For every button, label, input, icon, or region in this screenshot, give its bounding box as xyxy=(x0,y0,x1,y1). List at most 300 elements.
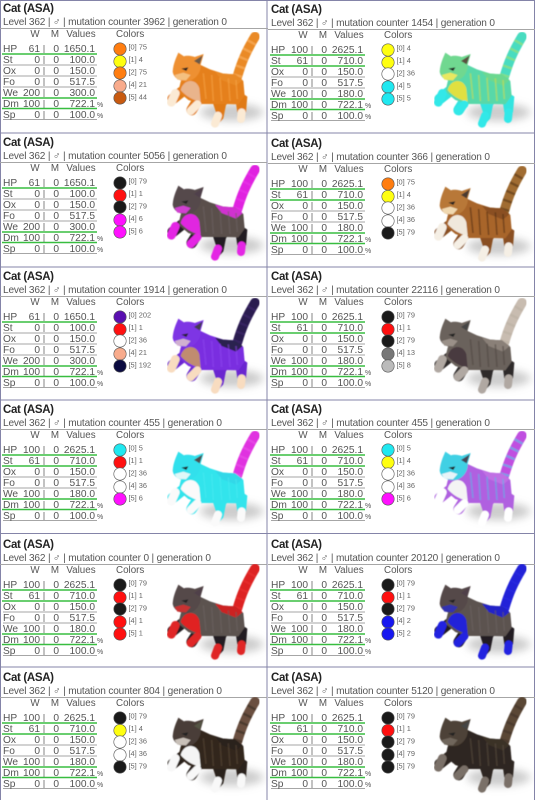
stats table: 0 xyxy=(302,67,308,78)
stats table: % xyxy=(365,237,371,244)
stats table: 61 xyxy=(29,724,40,735)
stats table: M xyxy=(51,698,59,709)
stats table: HP xyxy=(3,312,17,323)
stats table: 150.0 xyxy=(338,334,363,345)
stats table: 100 xyxy=(291,100,308,111)
stats table: % xyxy=(97,649,103,656)
stats table: 61 xyxy=(297,323,308,334)
stats table: 300.0 xyxy=(70,222,95,233)
colors legend: [0] 75 xyxy=(396,178,415,186)
stats table: 0 xyxy=(53,88,59,99)
colors legend: [0] 79 xyxy=(396,578,415,588)
stats table: M xyxy=(51,297,59,308)
stats table: St xyxy=(271,724,281,735)
stats table xyxy=(0,698,267,790)
stats table: We xyxy=(271,757,286,768)
stats table: 180.0 xyxy=(338,223,363,234)
stats table: 0 xyxy=(302,646,308,657)
icon: purple cat xyxy=(171,303,263,391)
colors legend: [0] 79 xyxy=(128,176,147,186)
colors legend: [0] 79 xyxy=(396,712,415,720)
stats table: 150.0 xyxy=(70,200,95,211)
stats table: 0 xyxy=(53,312,59,323)
stats table: 0 xyxy=(53,200,59,211)
stats table: 0 xyxy=(321,245,327,256)
stats table: We xyxy=(3,489,18,500)
stats table: 0 xyxy=(321,635,327,646)
stats table: Fo xyxy=(271,78,283,89)
stats table: 61 xyxy=(29,178,40,189)
stats table: 710.0 xyxy=(338,190,363,201)
stats table: 0 xyxy=(53,323,59,334)
stats table: 0 xyxy=(321,456,327,467)
stats table: M xyxy=(51,163,59,174)
stats table: We xyxy=(3,88,18,99)
stats table: 0 xyxy=(321,201,327,212)
stats table: 0 xyxy=(302,345,308,356)
stats table: % xyxy=(365,514,371,521)
stats table: 100.0 xyxy=(70,189,95,200)
stats table: Ox xyxy=(3,467,16,478)
stats table: 0 xyxy=(34,189,40,200)
stats table: 0 xyxy=(321,223,327,234)
stats table: 0 xyxy=(53,602,59,613)
colors legend: [5] 5 xyxy=(396,94,411,102)
stats table: 2625.1 xyxy=(64,445,95,456)
stats table: 0 xyxy=(53,356,59,367)
panel: cat card left 3 xyxy=(0,271,267,391)
stats table: 0 xyxy=(321,312,327,323)
stats table: 0 xyxy=(34,779,40,790)
stats table: 722.1 xyxy=(338,234,363,245)
subtitle: Level 362 | ♂ | mutation counter 5056 | generation 0 xyxy=(3,151,227,162)
stats table: 61 xyxy=(29,44,40,55)
stats table: % xyxy=(365,771,371,778)
stats table: 300.0 xyxy=(70,88,95,99)
stats table xyxy=(268,296,535,389)
panel: cat card right 5 xyxy=(268,539,535,657)
stats table: We xyxy=(3,356,18,367)
stats table: 61 xyxy=(297,56,308,67)
stats table: Dm xyxy=(271,500,287,511)
stats table: 100.0 xyxy=(70,646,95,657)
stats table: 61 xyxy=(297,190,308,201)
stats table: 0 xyxy=(321,467,327,478)
stats table: W xyxy=(30,430,40,441)
colors legend: Colors xyxy=(384,164,412,175)
stats table: Values xyxy=(334,297,364,308)
stats table: 0 xyxy=(321,212,327,223)
stats table: 710.0 xyxy=(70,591,95,602)
stats table: 0 xyxy=(302,511,308,522)
stats table: 0 xyxy=(321,67,327,78)
stats table: Values xyxy=(334,430,364,441)
colors legend: [1] 4 xyxy=(396,56,411,65)
stats table: Fo xyxy=(3,211,15,222)
stats table: 0 xyxy=(302,78,308,89)
stats table: % xyxy=(365,114,371,121)
icon: tabby brown cat xyxy=(438,171,530,259)
colors legend: [4] 36 xyxy=(396,481,415,490)
stats table: 722.1 xyxy=(70,99,95,110)
stats table: 2625.1 xyxy=(332,312,363,323)
colors legend: [0] 5 xyxy=(128,444,143,452)
stats table: Values xyxy=(66,565,96,576)
stats table: Values xyxy=(334,698,364,709)
stats table: 0 xyxy=(302,602,308,613)
colors legend: [2] 75 xyxy=(128,68,147,76)
stats table: St xyxy=(3,591,13,602)
stats table: 100 xyxy=(291,445,308,456)
colors legend: [2] 36 xyxy=(396,202,415,212)
stats table: St xyxy=(271,56,281,67)
colors legend: [5] 2 xyxy=(396,628,411,638)
stats table: Sp xyxy=(3,511,16,522)
stats table: 150.0 xyxy=(338,67,363,78)
stats table: 0 xyxy=(321,779,327,790)
stats table: M xyxy=(319,698,327,709)
stats table: Values xyxy=(66,430,96,441)
stats table: % xyxy=(97,102,103,109)
panel: cat card right 6 xyxy=(268,672,535,790)
stats table: 100.0 xyxy=(70,110,95,121)
colors legend: Colors xyxy=(384,30,412,41)
stats table: Dm xyxy=(271,100,287,111)
stats table: 0 xyxy=(53,345,59,356)
stats table: 517.5 xyxy=(338,78,363,89)
colors legend: [4] 21 xyxy=(128,80,147,89)
stats table: We xyxy=(3,624,18,635)
stats table: Ox xyxy=(271,334,284,345)
stats table: Values xyxy=(66,29,96,40)
stats table: 100.0 xyxy=(338,378,363,389)
stats table: Values xyxy=(66,163,96,174)
stats table: 0 xyxy=(53,580,59,591)
stats table: 0 xyxy=(321,111,327,122)
stats table: 722.1 xyxy=(338,100,363,111)
colors legend: [1] 4 xyxy=(396,456,411,465)
icon: orange cat xyxy=(171,37,263,125)
stats table: 0 xyxy=(53,779,59,790)
title: Cat (ASA) xyxy=(271,672,322,684)
stats table: 0 xyxy=(53,211,59,222)
stats table: We xyxy=(271,223,286,234)
colors legend: [5] 1 xyxy=(128,628,143,638)
stats table: 0 xyxy=(53,635,59,646)
title: Cat (ASA) xyxy=(271,404,322,416)
stats table: % xyxy=(365,782,371,789)
subtitle: Level 362 | ♂ | mutation counter 455 | generation 0 xyxy=(271,418,490,429)
stats table: 100.0 xyxy=(338,111,363,122)
stats table: 0 xyxy=(53,489,59,500)
stats table: 150.0 xyxy=(70,66,95,77)
stats table: 180.0 xyxy=(338,757,363,768)
stats table: % xyxy=(97,236,103,243)
stats table: Ox xyxy=(3,735,16,746)
stats table: 0 xyxy=(302,779,308,790)
stats table: 0 xyxy=(53,646,59,657)
stats table: 0 xyxy=(321,345,327,356)
colors legend: Colors xyxy=(116,297,144,308)
stats table: 100.0 xyxy=(70,55,95,66)
colors legend: [4] 36 xyxy=(128,749,147,758)
stats table: We xyxy=(271,89,286,100)
stats table: 100 xyxy=(23,635,40,646)
stats table: 722.1 xyxy=(70,233,95,244)
colors legend: [5] 79 xyxy=(396,228,415,236)
colors legend xyxy=(114,698,147,773)
stats table: Dm xyxy=(3,768,19,779)
colors legend: Colors xyxy=(384,698,412,709)
colors legend xyxy=(382,698,415,773)
stats table: 100 xyxy=(291,500,308,511)
stats table: 710.0 xyxy=(338,56,363,67)
stats table: Values xyxy=(66,297,96,308)
stats table: 0 xyxy=(34,746,40,757)
stats table: 100 xyxy=(23,580,40,591)
stats table: 0 xyxy=(34,77,40,88)
stats table: 517.5 xyxy=(70,211,95,222)
stats table: % xyxy=(365,649,371,656)
icon: green and cyan cat xyxy=(438,37,530,125)
stats table: 0 xyxy=(321,179,327,190)
panel: cat card left 1 xyxy=(0,3,268,125)
colors legend: [2] 79 xyxy=(128,604,147,612)
stats table: % xyxy=(97,782,103,789)
stats table: 180.0 xyxy=(338,356,363,367)
title: Cat (ASA) xyxy=(271,539,322,551)
stats table: 100 xyxy=(291,45,308,56)
stats table: 180.0 xyxy=(70,489,95,500)
colors legend xyxy=(114,430,147,505)
stats table: 517.5 xyxy=(70,613,95,624)
colors legend: [2] 36 xyxy=(128,336,147,344)
stats table: Dm xyxy=(271,367,287,378)
stats table: 0 xyxy=(53,99,59,110)
stats table: M xyxy=(319,164,327,175)
stats table: 722.1 xyxy=(70,500,95,511)
stats table: 722.1 xyxy=(70,768,95,779)
stats table: % xyxy=(365,638,371,645)
stats table: 0 xyxy=(321,757,327,768)
icon: black and blue cat xyxy=(438,569,530,657)
stats table: 61 xyxy=(297,591,308,602)
stats table: 517.5 xyxy=(70,345,95,356)
stats table: 722.1 xyxy=(338,367,363,378)
stats table: 0 xyxy=(321,367,327,378)
stats table: Sp xyxy=(271,646,284,657)
stats table: 0 xyxy=(53,334,59,345)
stats table: Sp xyxy=(3,244,16,255)
stats table: 0 xyxy=(53,378,59,389)
stats table: 180.0 xyxy=(338,489,363,500)
stats table: Dm xyxy=(271,635,287,646)
stats table: St xyxy=(271,456,281,467)
title: Cat (ASA) xyxy=(3,404,54,416)
stats table: M xyxy=(51,565,59,576)
stats table: Fo xyxy=(3,345,15,356)
icon: purple and cyan striped cat xyxy=(438,436,530,524)
colors legend: [1] 1 xyxy=(128,189,143,198)
colors legend: [5] 6 xyxy=(128,494,143,502)
stats table: 0 xyxy=(302,245,308,256)
stats table: St xyxy=(271,591,281,602)
stats table: W xyxy=(298,297,308,308)
subtitle: Level 362 | ♂ | mutation counter 20120 | generation 0 xyxy=(271,553,500,564)
colors legend: [1] 1 xyxy=(396,724,411,733)
colors legend xyxy=(114,29,147,104)
stats table: Values xyxy=(334,565,364,576)
stats table: 100 xyxy=(23,367,40,378)
stats table: 0 xyxy=(34,211,40,222)
stats table: 722.1 xyxy=(70,367,95,378)
stats table: 100.0 xyxy=(70,323,95,334)
stats table: 0 xyxy=(53,735,59,746)
stats table xyxy=(0,162,267,255)
stats table: 0 xyxy=(321,378,327,389)
stats table: HP xyxy=(3,178,17,189)
stats table: W xyxy=(30,297,40,308)
stats table: 200 xyxy=(23,88,40,99)
stats table: 0 xyxy=(34,323,40,334)
stats table: 0 xyxy=(302,467,308,478)
stats table: St xyxy=(271,190,281,201)
subtitle: Level 362 | ♂ | mutation counter 455 | generation 0 xyxy=(3,418,222,429)
stats table: Ox xyxy=(3,66,16,77)
stats table: 0 xyxy=(321,323,327,334)
stats table: 100 xyxy=(291,713,308,724)
stats table: 61 xyxy=(29,591,40,602)
stats table: Sp xyxy=(3,779,16,790)
stats table: 0 xyxy=(321,234,327,245)
stats table: HP xyxy=(3,713,17,724)
colors legend: Colors xyxy=(384,430,412,441)
stats table: HP xyxy=(271,713,285,724)
stats table: % xyxy=(97,503,103,510)
stats table: Sp xyxy=(271,511,284,522)
stats table xyxy=(0,28,268,121)
stats table: We xyxy=(271,356,286,367)
colors legend xyxy=(382,164,415,239)
colors legend: [5] 44 xyxy=(128,92,147,102)
colors legend: [5] 6 xyxy=(128,226,143,236)
stats table: 150.0 xyxy=(70,602,95,613)
stats table: Dm xyxy=(3,233,19,244)
stats table: 0 xyxy=(53,244,59,255)
title: Cat (ASA) xyxy=(271,4,322,16)
stats table: 517.5 xyxy=(70,746,95,757)
stats table: HP xyxy=(271,179,285,190)
stats table: St xyxy=(3,456,13,467)
stats table: St xyxy=(271,323,281,334)
stats table: 150.0 xyxy=(338,602,363,613)
colors legend: [2] 36 xyxy=(128,736,147,746)
stats table: 0 xyxy=(53,222,59,233)
stats table: 0 xyxy=(53,511,59,522)
stats table: 0 xyxy=(34,467,40,478)
title: Cat (ASA) xyxy=(3,137,54,149)
stats table: 150.0 xyxy=(338,735,363,746)
stats table: 0 xyxy=(53,624,59,635)
colors legend: [1] 1 xyxy=(128,456,143,465)
stats table: 0 xyxy=(34,511,40,522)
colors legend: [1] 1 xyxy=(396,591,411,600)
stats table: 61 xyxy=(29,456,40,467)
stats table: 0 xyxy=(321,511,327,522)
stats table: Ox xyxy=(271,467,284,478)
stats table: 0 xyxy=(34,602,40,613)
colors legend: [4] 1 xyxy=(128,616,143,625)
stats table: 0 xyxy=(34,66,40,77)
stats table: HP xyxy=(3,445,17,456)
stats table: Dm xyxy=(271,768,287,779)
stats table: We xyxy=(271,624,286,635)
stats table: 710.0 xyxy=(338,591,363,602)
stats table: 150.0 xyxy=(70,467,95,478)
stats table: 100 xyxy=(291,635,308,646)
stats table: 0 xyxy=(34,646,40,657)
stats table: St xyxy=(3,323,13,334)
subtitle: Level 362 | ♂ | mutation counter 5120 | generation 0 xyxy=(271,686,495,697)
stats table: 0 xyxy=(302,334,308,345)
stats table: M xyxy=(51,29,59,40)
stats table: 0 xyxy=(302,378,308,389)
stats table: 0 xyxy=(53,768,59,779)
stats table: % xyxy=(97,771,103,778)
stats table: Sp xyxy=(271,111,284,122)
stats table: Ox xyxy=(3,334,16,345)
stats table: 2625.1 xyxy=(332,445,363,456)
stats table: 0 xyxy=(53,110,59,121)
stats table: Fo xyxy=(271,746,283,757)
colors legend: Colors xyxy=(116,565,144,576)
panel: cat card right 4 xyxy=(268,404,535,524)
stats table: 0 xyxy=(321,624,327,635)
stats table: St xyxy=(3,189,13,200)
stats table: 100.0 xyxy=(70,511,95,522)
stats table: 0 xyxy=(53,467,59,478)
stats table: 150.0 xyxy=(70,735,95,746)
stats table xyxy=(268,30,535,122)
panel: cat card right 3 xyxy=(268,271,535,391)
stats table: We xyxy=(3,222,18,233)
stats table: Dm xyxy=(271,234,287,245)
stats table: 150.0 xyxy=(70,334,95,345)
stats table: 150.0 xyxy=(338,467,363,478)
stats table: 180.0 xyxy=(70,624,95,635)
stats table: St xyxy=(3,55,13,66)
stats table: 517.5 xyxy=(338,746,363,757)
stats table: 100 xyxy=(291,580,308,591)
colors legend: [2] 79 xyxy=(396,336,415,344)
colors legend: [5] 8 xyxy=(396,360,411,370)
stats table: 0 xyxy=(34,200,40,211)
icon: dark brown cat xyxy=(438,702,530,790)
stats table: We xyxy=(271,489,286,500)
stats table: Fo xyxy=(3,77,15,88)
colors legend: [2] 36 xyxy=(396,68,415,78)
colors legend: [1] 4 xyxy=(396,190,411,199)
stats table: 0 xyxy=(321,89,327,100)
colors legend: [5] 79 xyxy=(128,762,147,770)
stats table: Values xyxy=(334,164,364,175)
colors legend: [1] 4 xyxy=(128,55,143,64)
stats table: 0 xyxy=(321,735,327,746)
stats table: Dm xyxy=(3,367,19,378)
colors legend: [0] 4 xyxy=(396,44,411,52)
stats table: 0 xyxy=(53,500,59,511)
stats table: 722.1 xyxy=(70,635,95,646)
